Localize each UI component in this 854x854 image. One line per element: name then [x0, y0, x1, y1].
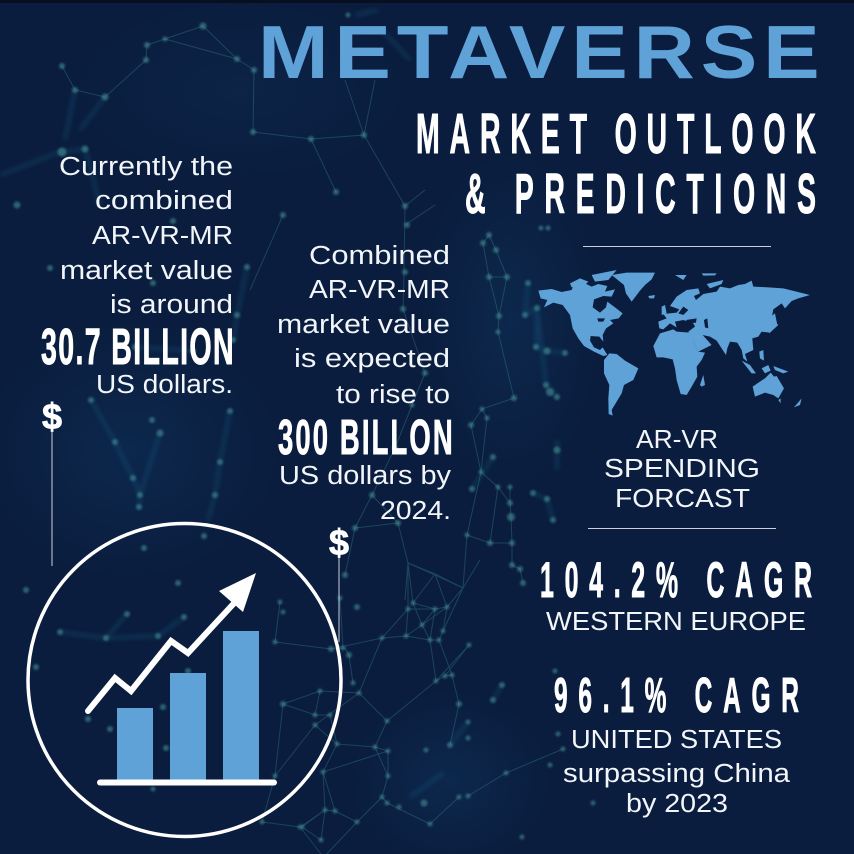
- text block: current market value: is around: [110, 291, 233, 319]
- text block: current market value: AR-VR-MR: [92, 222, 233, 250]
- icon: dollar sign left: $: [42, 396, 62, 437]
- stat: Western Europe: 104.2% CAGR: [540, 553, 812, 608]
- text block: spending forecast: [604, 426, 760, 513]
- arrow: [88, 573, 256, 711]
- text block: spending forecast: AR-VR: [636, 426, 718, 454]
- divider top: [583, 246, 771, 248]
- network lines: [62, 26, 563, 854]
- text block: expected market value: US dollars by: [279, 462, 451, 490]
- stat: United States: [554, 669, 799, 818]
- text block: expected market value: [277, 242, 453, 525]
- stat: Western Europe: WESTERN EUROPE: [546, 608, 806, 636]
- text block: current market value: market value: [60, 257, 233, 285]
- text block: expected market value: 300 BILLON: [278, 411, 453, 465]
- stat: United States: surpassing China: [563, 760, 791, 788]
- stat: Western Europe: [540, 553, 812, 636]
- text block: current market value: 30.7 BILLION: [41, 318, 234, 375]
- subtitle: MARKET OUTLOOK: [416, 101, 816, 166]
- network nodes: [14, 12, 596, 842]
- icon: dollar sign middle: [329, 522, 349, 642]
- map water details: [597, 307, 708, 328]
- divider bottom: [588, 528, 776, 530]
- text block: current market value: Currently the: [59, 153, 233, 181]
- bar chart: [117, 631, 259, 780]
- text block: current market value: US dollars.: [96, 371, 233, 399]
- subtitle: & PREDICTIONS: [465, 161, 816, 226]
- text block: expected market value: to rise to: [336, 381, 450, 409]
- text block: expected market value: Combined: [309, 242, 450, 270]
- text block: expected market value: 2024.: [380, 497, 451, 525]
- text block: expected market value: market value: [277, 311, 450, 339]
- icon: growth chart in circle: [28, 524, 341, 836]
- text block: expected market value: AR-VR-MR: [309, 276, 450, 304]
- stat: United States: 96.1% CAGR: [554, 669, 799, 723]
- text block: current market value: combined: [95, 187, 233, 215]
- stat: United States: UNITED STATES: [571, 726, 782, 754]
- icon: dollar sign middle: $: [329, 522, 349, 563]
- text block: current market value: [41, 153, 234, 399]
- subtitle: [416, 101, 816, 226]
- text block: spending forecast: SPENDING: [604, 455, 760, 483]
- title: METAVERSE: [258, 11, 820, 94]
- stat: United States: by 2023: [626, 790, 728, 818]
- text block: expected market value: is expected: [294, 345, 450, 373]
- blurred strands: [0, 10, 565, 797]
- icon: world map: [538, 270, 810, 416]
- text block: spending forecast: FORCAST: [615, 485, 750, 513]
